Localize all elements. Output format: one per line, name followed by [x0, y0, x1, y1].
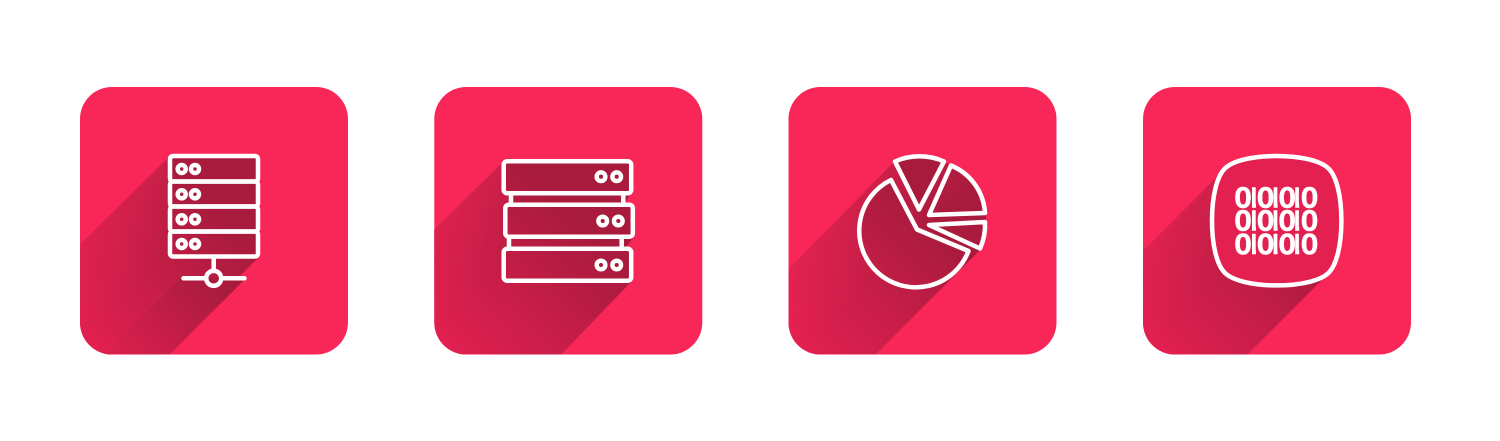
- binary digits: 0: [1257, 199, 1274, 239]
- binary digits: 1: [1266, 176, 1283, 216]
- binary digits: 1: [1266, 223, 1283, 263]
- card background: [80, 87, 348, 354]
- binary digits: 0: [1278, 176, 1296, 216]
- icon: server rack with network node: [170, 156, 258, 286]
- panel: pie chart card: [770, 87, 1056, 360]
- binary digits: 0: [1234, 199, 1252, 239]
- binary digits: 0: [1234, 222, 1252, 263]
- binary digits: 0: [1257, 222, 1274, 263]
- binary digits: 1: [1288, 223, 1304, 263]
- icon: rounded chip outline: [1212, 156, 1341, 285]
- binary digits: 0: [1301, 199, 1318, 239]
- binary digits: 1: [1288, 200, 1304, 240]
- binary digits: 1: [1266, 200, 1283, 240]
- binary digits: 0: [1278, 222, 1296, 263]
- binary digits: 0: [1278, 199, 1296, 239]
- panel: server stack card: [434, 87, 702, 354]
- card background: [1143, 87, 1411, 354]
- icon: stacked server units: [504, 161, 633, 281]
- binary digits: 1: [1245, 223, 1261, 263]
- panel: server network card: [80, 87, 348, 354]
- long shadow: [788, 158, 986, 354]
- long shadow: [434, 163, 633, 354]
- binary digits: 1: [1245, 200, 1261, 240]
- card background: [434, 87, 702, 354]
- binary digits: 0: [1234, 176, 1252, 216]
- long shadow: [80, 158, 258, 354]
- binary digits: 0: [1301, 176, 1318, 216]
- card background: [788, 87, 1056, 354]
- binary digits: 1: [1288, 176, 1304, 216]
- binary digits: 1: [1245, 176, 1261, 216]
- binary digits: [1235, 186, 1318, 255]
- icon: pie chart with separated slices: [859, 156, 985, 287]
- long shadow: [1143, 158, 1339, 354]
- binary digits: 0: [1257, 176, 1274, 216]
- panel: binary code card: [1143, 87, 1411, 354]
- binary digits: 0: [1301, 222, 1318, 263]
